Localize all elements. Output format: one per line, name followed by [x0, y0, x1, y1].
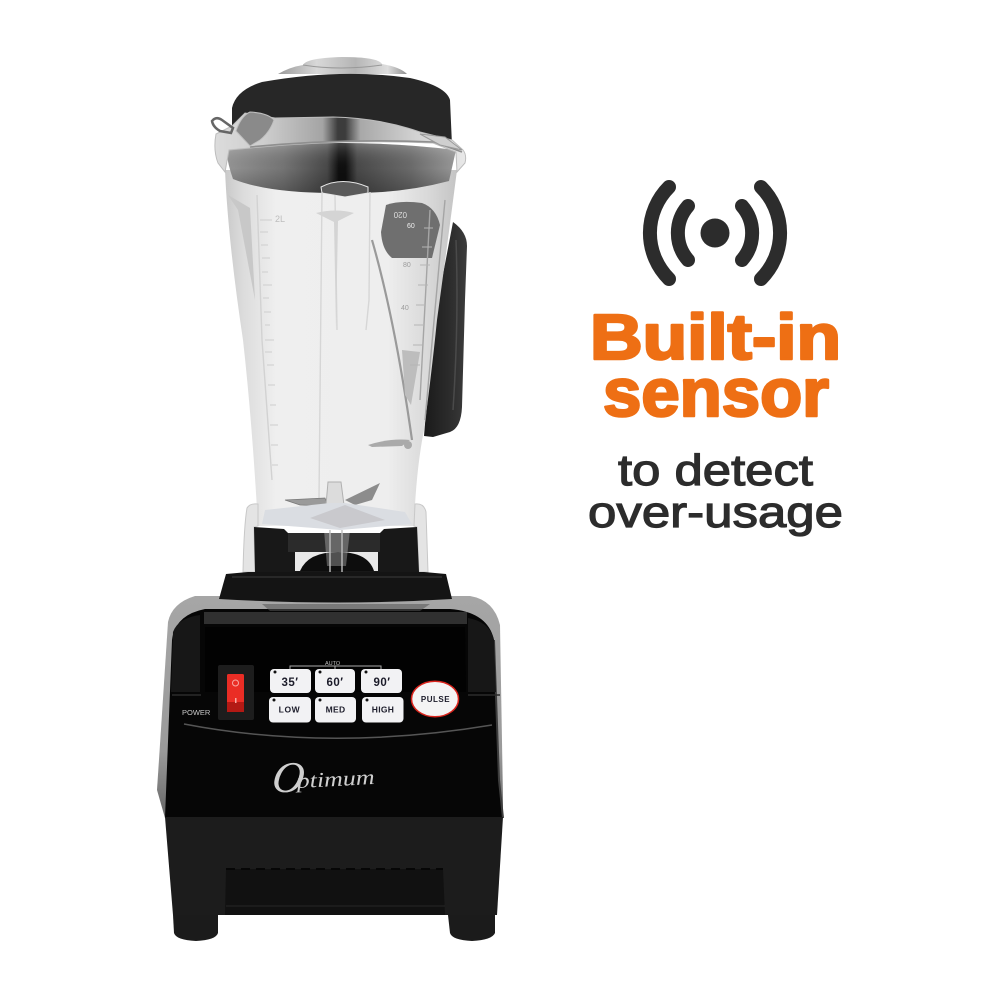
control buttons: 35′	[281, 677, 299, 689]
left scale	[257, 195, 272, 480]
rim	[215, 113, 466, 172]
jar collar	[243, 504, 428, 572]
base collar	[219, 572, 452, 611]
subheading: to detect over-usage: over-usage	[588, 488, 843, 537]
heading: Built-in sensor	[590, 301, 841, 431]
centre column top	[321, 182, 368, 197]
jar lid	[232, 74, 452, 145]
control buttons: 60′	[326, 677, 344, 689]
blender	[157, 57, 503, 941]
spout	[236, 112, 274, 146]
jar body: 80	[403, 262, 411, 269]
jar handle	[424, 222, 467, 437]
control panel recess	[205, 627, 466, 692]
power switch	[218, 665, 254, 720]
jar body	[212, 112, 466, 526]
label: AUTO with bracket: AUTO	[325, 661, 341, 667]
icon: sensor signal	[650, 187, 780, 279]
control buttons: LOW	[279, 704, 301, 714]
control buttons: HIGH	[372, 704, 394, 714]
heading: Built-in sensor: sensor	[603, 355, 829, 431]
panel curve	[184, 724, 492, 738]
jar body: 60	[407, 223, 415, 230]
label: POWER: POWER	[182, 708, 211, 717]
pulse button: PULSE	[421, 695, 450, 704]
brand: Optimum: ptimum	[294, 765, 375, 793]
feet	[173, 915, 495, 941]
brand: Optimum: O	[269, 753, 308, 802]
subheading: to detect over-usage: to detect	[618, 446, 813, 495]
jar body: 40	[401, 305, 409, 312]
wall rib	[372, 240, 412, 440]
lower base with vent	[165, 817, 503, 915]
blade assembly	[262, 482, 412, 530]
motor housing	[157, 596, 503, 818]
jar body: 020	[393, 210, 407, 219]
pulse button	[412, 681, 458, 717]
heading: Built-in sensor: Built-in	[590, 301, 841, 373]
control buttons: 90′	[373, 677, 391, 689]
control buttons	[269, 669, 404, 722]
column	[319, 192, 370, 500]
brand: Optimum	[269, 753, 375, 802]
control buttons: MED	[326, 704, 345, 714]
lid steel cap	[278, 57, 407, 74]
dark reflection band	[226, 143, 456, 193]
jar body: 2L	[275, 214, 285, 224]
label: AUTO with bracket	[290, 661, 381, 669]
right scale	[420, 200, 445, 420]
subheading: to detect over-usage	[588, 446, 843, 537]
measure window	[381, 202, 440, 258]
lower wall tab	[368, 440, 410, 447]
